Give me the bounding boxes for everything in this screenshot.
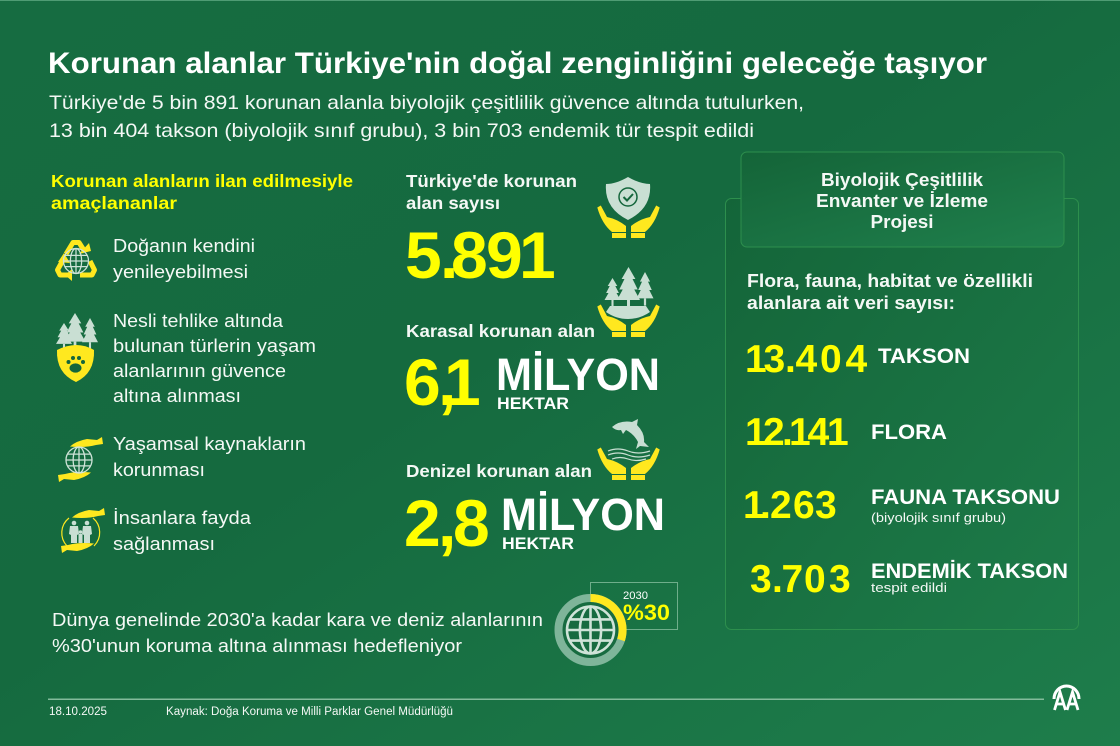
footer rule <box>48 698 1044 700</box>
label: Denizel korunan alan <box>406 461 592 481</box>
text: 2030 target <box>52 609 543 656</box>
panel intro: Flora, fauna, habitat ve özellikli <box>747 271 1033 291</box>
subtitle: Türkiye'de 5 bin 891 korunan alanla biyolojik çeşitlilik güvence altında tutulurken, <box>49 92 804 114</box>
label box: 2030 <box>623 590 648 602</box>
chart: 30 percent ring <box>558 582 678 662</box>
stat: protected area count <box>405 171 660 292</box>
text: item 2 <box>113 310 316 406</box>
panel intro: alanlara ait veri sayısı: <box>747 293 955 313</box>
label box <box>590 582 678 630</box>
icon: globe <box>567 606 614 654</box>
text: item 3: korunması <box>113 459 205 480</box>
text: item 4 <box>113 507 252 554</box>
panel header: Envanter ve İzleme <box>816 191 988 211</box>
footer date: 18.10.2025 <box>49 706 107 718</box>
icon: trees and paw shield <box>56 313 98 382</box>
row: takson: TAKSON <box>878 345 970 368</box>
label <box>406 171 577 213</box>
heading: aims: Korunan alanların ilan edilmesiyle <box>51 171 353 191</box>
footer source: Kaynak: Doğa Koruma ve Milli Parklar Genel Müdürlüğü <box>166 706 453 718</box>
unit: HEKTAR <box>497 394 569 413</box>
row: endemic <box>750 558 1068 601</box>
label: Karasal korunan alan <box>406 321 595 341</box>
value: 2,8 <box>404 486 490 560</box>
text: item 1: yenileyebilmesi <box>113 261 248 282</box>
icon: hands and family <box>61 508 105 553</box>
row: endemic: 3.703 <box>750 558 851 601</box>
text: item 3 <box>113 433 306 480</box>
label: Türkiye'de korunan <box>406 171 577 191</box>
text: item 2: alanlarının güvence <box>113 360 286 381</box>
panel header <box>741 152 1064 247</box>
panel header: Biyolojik Çeşitlilik <box>821 170 984 190</box>
panel intro <box>747 271 1033 313</box>
stat: terrestrial area <box>404 267 660 419</box>
text: item 2: Nesli tehlike altında <box>113 310 284 331</box>
icon: recycling globe <box>58 242 94 281</box>
text: 2030 target: Dünya genelinde 2030'a kadar kara ve deniz alanlarının <box>52 609 543 630</box>
row: fauna <box>743 484 1060 527</box>
subtitle <box>49 92 804 142</box>
panel background <box>726 198 1078 630</box>
unit: HEKTAR <box>502 534 574 553</box>
label: alan sayısı <box>406 193 500 213</box>
label box: %30 <box>623 600 670 625</box>
stat: marine area <box>404 419 665 560</box>
value: 5.891 <box>405 218 556 292</box>
panel: aims <box>51 171 353 554</box>
text: 2030 target: %30'unun koruma altına alınması hedefleniyor <box>52 635 462 656</box>
heading: aims <box>51 171 353 213</box>
heading: aims: amaçlananlar <box>51 193 177 213</box>
title: Korunan alanlar Türkiye'nin doğal zenginliğini geleceğe taşıyor <box>48 47 987 80</box>
value: 6,1 <box>404 345 481 419</box>
row: endemic: tespit edildi <box>871 581 947 595</box>
row: fauna: 1.263 <box>743 484 837 527</box>
icon: dolphin in hands <box>597 419 660 480</box>
row: takson: 13.404 <box>745 338 868 381</box>
panel header: Projesi <box>870 212 934 232</box>
text: item 1: Doğanın kendini <box>113 235 255 256</box>
text: item 1 <box>113 235 255 282</box>
row: flora: FLORA <box>871 421 947 444</box>
text: item 2: altına alınması <box>113 385 241 406</box>
row: fauna: FAUNA TAKSONU <box>871 486 1060 509</box>
icon: AA logo <box>1054 686 1079 710</box>
icon: shield in hands <box>597 177 660 238</box>
icon: trees in hands <box>597 267 660 337</box>
text: item 4: sağlanması <box>113 533 215 554</box>
panel: biodiversity inventory <box>726 152 1078 630</box>
ring <box>558 598 622 662</box>
text: item 4: İnsanlara fayda <box>113 507 252 528</box>
text: item 3: Yaşamsal kaynakların <box>113 433 306 454</box>
unit: MİLYON <box>496 349 660 400</box>
icon: hands and globe <box>58 437 103 482</box>
row: takson <box>745 338 970 381</box>
text: item 2: bulunan türlerin yaşam <box>113 335 316 356</box>
row: flora: 12.141 <box>745 411 849 454</box>
row: fauna: (biyolojik sınıf grubu) <box>871 511 1006 525</box>
row: flora <box>745 411 947 454</box>
row: endemic: ENDEMİK TAKSON <box>871 560 1068 583</box>
subtitle: 13 bin 404 takson (biyolojik sınıf grubu), 3 bin 703 endemik tür tespit edildi <box>49 120 754 142</box>
unit: MİLYON <box>501 489 665 540</box>
